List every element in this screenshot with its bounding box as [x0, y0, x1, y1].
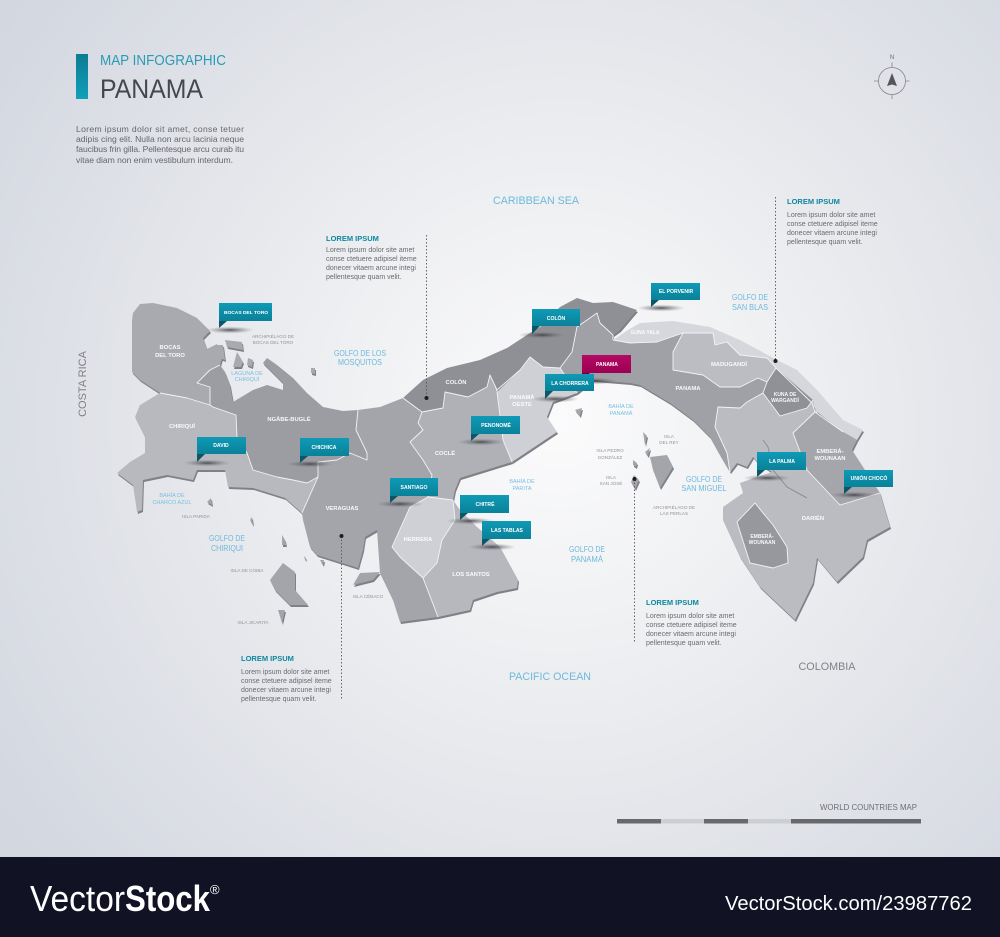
- pin: Las Tablas: [468, 521, 531, 550]
- water and island labels: ISLA JICARITA: [237, 620, 269, 625]
- water and island labels: BOCAS DEL TORO: [253, 340, 294, 345]
- islands: Bocas archipelago: [217, 340, 315, 374]
- region labels: COCLÉ: [435, 449, 455, 457]
- water and island labels: LAGUNA DE: [231, 371, 263, 377]
- region: Madugandí: [673, 333, 776, 387]
- region labels: LOS SANTOS: [452, 572, 490, 578]
- water and island labels: GONZÁLEZ: [598, 454, 623, 460]
- water and island labels: GOLFO DE: [686, 474, 722, 484]
- water and island labels: LAS PERLAS: [660, 511, 688, 516]
- region labels: GUNA YALA: [630, 330, 660, 336]
- callout: Lorem ipsum, south-east: LOREM IPSUM: [646, 598, 699, 607]
- water and island labels: ISLA CÉBACO: [353, 593, 384, 599]
- region: Los Santos: [423, 500, 518, 617]
- scale label: WORLD COUNTRIES MAP: [820, 803, 917, 812]
- callout: Lorem ipsum, south-west: [241, 534, 344, 703]
- water and island labels: [152, 292, 768, 625]
- callout: Lorem ipsum, north-east: LOREM IPSUM: [787, 197, 840, 206]
- region labels: WARGANDÍ: [771, 396, 799, 404]
- callout: Lorem ipsum, south-east: Lorem ipsum dolor site amet: [646, 613, 734, 620]
- pin: Las Tablas: LAS TABLAS: [491, 528, 524, 534]
- callout: Lorem ipsum, north-east: [774, 197, 878, 363]
- region labels: WOUNAAN: [815, 456, 845, 462]
- icon: compass: N: [890, 55, 894, 61]
- water and island labels: MOSQUITOS: [338, 357, 382, 367]
- region: Coclé: [410, 375, 512, 500]
- region: Panamá: [560, 313, 767, 472]
- callout: Lorem ipsum, Caribbean centre: [326, 234, 428, 400]
- region labels: CHIRIQUÍ: [169, 422, 195, 430]
- intro text block: vitae diam non enim vestibulum interdum.: [76, 155, 233, 165]
- region: Darién: [715, 393, 890, 620]
- region labels: VERAGUAS: [326, 506, 359, 512]
- island: Del Rey: [650, 455, 673, 488]
- pin: Colón: [518, 309, 580, 338]
- callout: Lorem ipsum, south-west: donecer vitaem arcune integi: [241, 687, 331, 694]
- pin: Colón: COLÓN: [547, 314, 566, 322]
- pin: Chichica: CHICHICA: [312, 445, 337, 451]
- region: Herrera: [392, 497, 455, 578]
- water and island labels: CHIRIQUI: [211, 543, 243, 553]
- region: Emberá-Wounaan south: [737, 503, 788, 568]
- pin: Bocas del Toro: [206, 303, 272, 334]
- callout: Lorem ipsum, south-west: conse ctetuere adipisel iteme: [241, 678, 332, 685]
- region labels: OESTE: [512, 402, 532, 408]
- region: Ngäbe-Buglé: [197, 358, 367, 483]
- callout: Lorem ipsum, south-east: pellentesque quam velit.: [646, 640, 722, 647]
- callout: Lorem ipsum, south-east: [632, 477, 737, 647]
- water and island labels: BAHÍA DE: [159, 492, 185, 499]
- region labels: MADUGANDÍ: [711, 360, 747, 368]
- region: Emberá-Wounaan: [793, 412, 880, 505]
- pin: Santiago: [376, 478, 438, 508]
- pin: Chichica: [286, 438, 349, 468]
- pin: Panama capital: PANAMA: [596, 362, 618, 368]
- island: Cébaco: [353, 572, 380, 585]
- water and island labels: PARITA: [512, 486, 532, 492]
- pin: La Palma: LA PALMA: [769, 459, 795, 465]
- callout: Lorem ipsum, north-east: conse ctetuere adipisel iteme: [787, 221, 878, 228]
- water and island labels: SAN MIGUEL: [682, 483, 727, 493]
- intro text block: Lorem ipsum dolor sit amet, conse tetuer: [76, 124, 244, 134]
- water and island labels: GOLFO DE: [732, 292, 768, 302]
- title: PANAMA: [100, 74, 203, 104]
- region labels: COLÓN: [446, 378, 466, 386]
- footer image id: VectorStock.com/23987762: [725, 893, 972, 915]
- region: Guna Yala: [613, 321, 863, 440]
- region: Colón: [403, 298, 637, 412]
- islands: small islets: [207, 408, 650, 565]
- region labels: BOCAS: [160, 345, 181, 351]
- intro text block: adipis cing elit. Nulla non arcu lacinia neque: [76, 134, 244, 144]
- water and island labels: ISLA PEDRO: [596, 448, 624, 453]
- callout: Lorem ipsum, north-east: Lorem ipsum dolor site amet: [787, 212, 875, 219]
- region labels: [155, 330, 845, 578]
- footer logo: Stock: [125, 878, 211, 919]
- region labels: DEL TORO: [155, 353, 185, 359]
- icon: compass: [874, 55, 910, 99]
- pin: David: [183, 437, 246, 466]
- water and island labels: CHARCO AZUL: [152, 500, 192, 506]
- region labels: PANAMÁ: [509, 394, 535, 401]
- intro text block: faucibus frin gilla. Pellentesque arcu curab itu: [76, 144, 244, 154]
- water and island labels: CHIRIQUÍ: [235, 376, 260, 383]
- sea label: caribbean sea: CARIBBEAN SEA: [493, 195, 580, 207]
- pin: Chitré: CHITRÉ: [476, 500, 495, 508]
- region: Veraguas: [302, 398, 438, 622]
- water and island labels: ISLA: [664, 434, 675, 439]
- callout: Lorem ipsum, south-east: donecer vitaem arcune integi: [646, 631, 736, 638]
- country label: colombia: COLOMBIA: [798, 661, 856, 673]
- island: Jicarita: [278, 610, 285, 623]
- map land with extruded coast: [117, 298, 890, 623]
- scale bar: [617, 819, 921, 824]
- callout: Lorem ipsum, Caribbean centre: conse ctetuere adipisel iteme: [326, 256, 417, 263]
- region labels: PANAMA: [675, 386, 701, 392]
- region labels: WOUNAAN: [749, 540, 776, 546]
- callout: Lorem ipsum, north-east: pellentesque quam velit.: [787, 239, 863, 246]
- footer band: [0, 857, 1000, 937]
- pin: David: DAVID: [213, 443, 229, 449]
- callout: Lorem ipsum, north-east: donecer vitaem arcune integi: [787, 230, 877, 237]
- region labels: NGÄBE-BUGLÉ: [267, 415, 311, 423]
- water and island labels: ARCHIPIÉLAGO DE: [252, 333, 294, 339]
- region labels: DARIÉN: [802, 514, 824, 522]
- pin: Chitré: [446, 495, 509, 524]
- water and island labels: ISLA PARIDA: [182, 514, 211, 519]
- map of Panama: [117, 298, 890, 623]
- pin: La Palma: [743, 452, 806, 482]
- callout: Lorem ipsum, south-west: LOREM IPSUM: [241, 654, 294, 663]
- callout: Lorem ipsum, south-west: Lorem ipsum dolor site amet: [241, 669, 329, 676]
- island: Coiba: [270, 563, 308, 605]
- pin: El Porvenir: EL PORVENIR: [659, 289, 693, 295]
- pin: Unión Chocó: [830, 470, 893, 498]
- pin: Unión Chocó: UNIÓN CHOCÓ: [851, 474, 887, 482]
- water and island labels: PANAMÁ: [610, 410, 633, 417]
- water and island labels: ISLA: [606, 475, 617, 480]
- pin: Bocas del Toro: BOCAS DEL TORO: [224, 310, 268, 316]
- country label: costa rica: COSTA RICA: [77, 350, 89, 417]
- pin: Penonomé: PENONOMÉ: [481, 421, 511, 429]
- footer logo: [30, 878, 220, 919]
- pin: Santiago: SANTIAGO: [401, 485, 427, 491]
- region labels: HERRERA: [404, 537, 433, 543]
- callout: Lorem ipsum, south-east: conse ctetuere adipisel iteme: [646, 622, 737, 629]
- water and island labels: GOLFO DE: [209, 533, 245, 543]
- pin: El Porvenir: [637, 283, 700, 312]
- footer logo: ®: [210, 882, 220, 897]
- water and island labels: DEL REY: [659, 440, 679, 445]
- region labels: KUNA DE: [774, 392, 797, 398]
- water and island labels: GOLFO DE: [569, 544, 605, 554]
- callout: Lorem ipsum, Caribbean centre: LOREM IPSUM: [326, 234, 379, 243]
- heading: map infographic: MAP INFOGRAPHIC: [100, 53, 226, 69]
- footer logo: Vector: [30, 878, 125, 919]
- water and island labels: SAN BLAS: [732, 302, 768, 312]
- river: Tuira: [763, 440, 807, 498]
- water and island labels: ARCHIPIÉLAGO DE: [653, 504, 695, 510]
- water and island labels: BAHÍA DE: [608, 403, 634, 410]
- intro text block: [76, 124, 244, 165]
- water and island labels: BAHÍA DE: [509, 478, 535, 485]
- water and island labels: PANAMÁ: [571, 554, 603, 564]
- pin: La Chorrera: [531, 374, 594, 402]
- pin: La Chorrera: LA CHORRERA: [551, 381, 589, 387]
- region: Chiriquí: [117, 393, 318, 513]
- header accent bar: [76, 54, 88, 99]
- region labels: EMBERÁ-: [750, 533, 774, 540]
- pin: Panama capital: [570, 355, 631, 384]
- region: Bocas del Toro: [132, 303, 222, 405]
- pin: Penonomé: [457, 416, 520, 446]
- region: Panamá Oeste: [497, 357, 577, 462]
- callout: Lorem ipsum, south-west: pellentesque quam velit.: [241, 696, 317, 703]
- callout: Lorem ipsum, Caribbean centre: donecer vitaem arcune integi: [326, 265, 416, 272]
- callout: Lorem ipsum, Caribbean centre: Lorem ipsum dolor site amet: [326, 247, 414, 254]
- water and island labels: ISLA DE COIBA: [231, 568, 264, 573]
- region: Kuna de Wargandí: [763, 368, 813, 416]
- callout: Lorem ipsum, Caribbean centre: pellentesque quam velit.: [326, 274, 402, 281]
- water and island labels: SAN JOSÉ: [600, 480, 622, 486]
- region labels: EMBERÁ-: [816, 448, 844, 455]
- sea label: pacific ocean: PACIFIC OCEAN: [509, 671, 591, 683]
- water and island labels: GOLFO DE LOS: [334, 348, 386, 358]
